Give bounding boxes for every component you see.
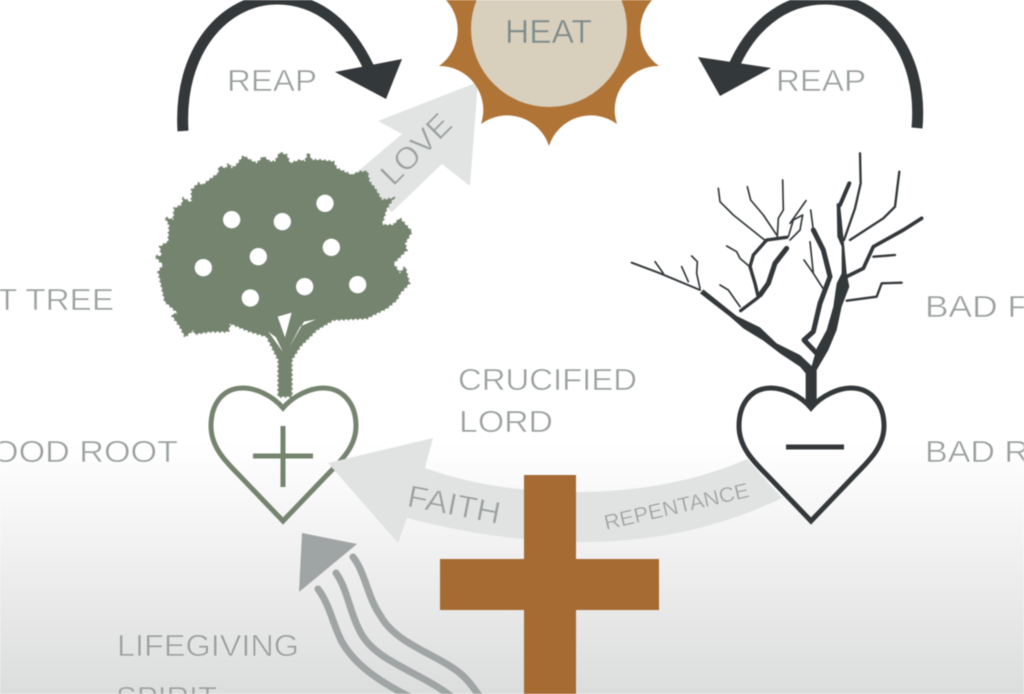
icon: fruit tree bbox=[155, 153, 412, 397]
label: crucified lord: LORD bbox=[459, 404, 553, 439]
label: love: LOVE bbox=[373, 106, 459, 192]
label: left reap: REAP bbox=[227, 63, 317, 98]
icon: right heart with minus bbox=[739, 388, 884, 521]
label: lifegiving spirit bbox=[116, 628, 299, 694]
icon: dead tree bbox=[632, 153, 922, 405]
arrow: faith and repentance bbox=[328, 438, 782, 694]
label: bad fruit: BAD F bbox=[925, 289, 1024, 324]
label: lifegiving spirit: LIFEGIVING bbox=[117, 628, 299, 663]
label: crucified lord: CRUCIFIED bbox=[458, 362, 637, 397]
label: fruit tree: T TREE bbox=[0, 282, 114, 317]
label: repentance: REPENTANCE bbox=[602, 479, 751, 535]
arrow: right reap bbox=[698, 0, 918, 128]
label: faith: FAITH bbox=[405, 479, 504, 531]
label: bad root: BAD R bbox=[925, 434, 1024, 469]
label: crucified lord bbox=[458, 362, 637, 439]
arrow: love bbox=[350, 82, 478, 212]
arrow: left reap bbox=[183, 0, 402, 131]
icon: left heart with plus bbox=[211, 388, 356, 521]
arrow: spirit bbox=[299, 533, 480, 694]
label: heat: HEAT bbox=[505, 13, 592, 50]
icon: sun bbox=[439, 0, 659, 146]
label: right reap: REAP bbox=[776, 63, 866, 98]
cross bbox=[440, 475, 659, 694]
